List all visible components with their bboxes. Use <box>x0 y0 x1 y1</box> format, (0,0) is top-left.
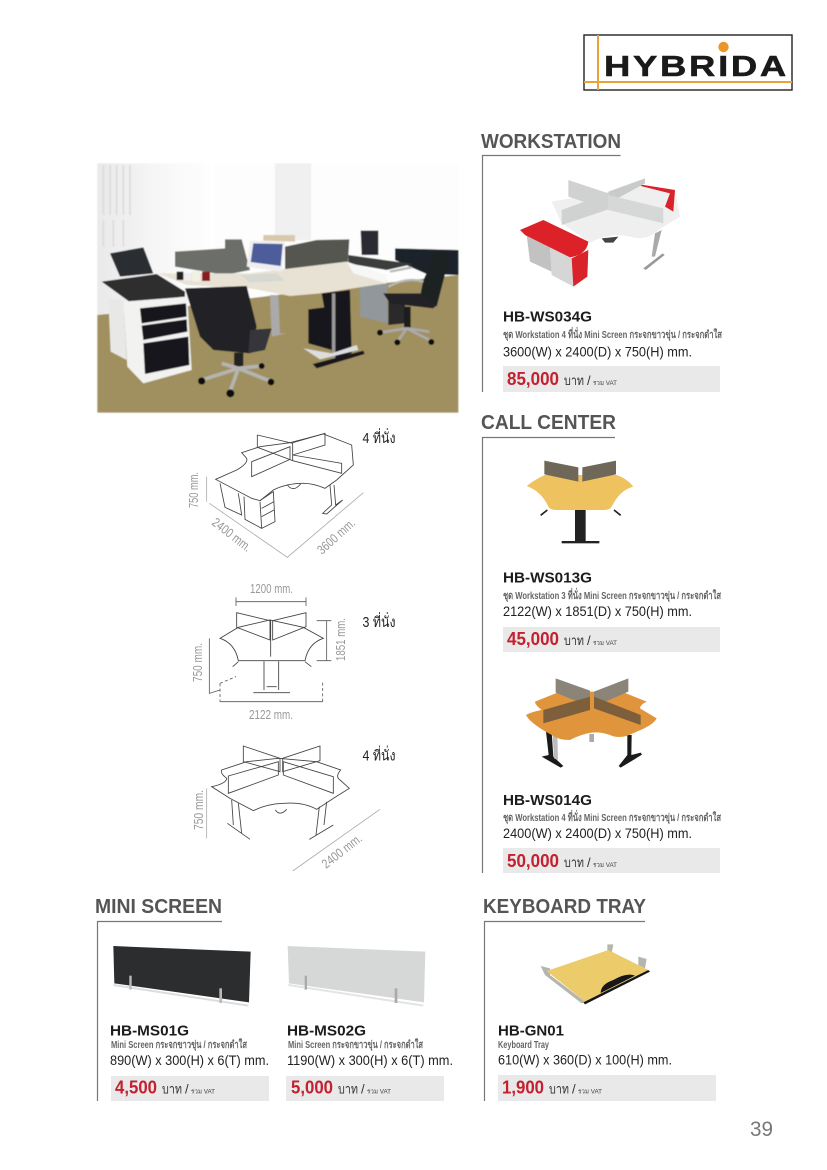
label: 4 seats: 4 ที่นั่ง <box>362 428 396 447</box>
panel: mini screen <box>95 896 453 1101</box>
price bar <box>498 1075 716 1101</box>
price bar: รวม VAT <box>593 640 617 647</box>
product code: HB-WS014G <box>503 792 592 809</box>
logo: Hybrida <box>584 35 792 90</box>
price bar <box>111 1076 269 1101</box>
dimensions: 610(W) x 360(D) x 100(H) mm. <box>498 1052 672 1068</box>
product code: HB-MS02G <box>287 1022 366 1040</box>
price bar: รวม VAT <box>578 1088 602 1096</box>
price bar: บาท <box>564 373 584 388</box>
price bar: / <box>587 633 591 648</box>
description: ชุด Workstation 4 ที่นั่ง Mini Screen กระจกขาวขุ่น / กระจกดำใส <box>503 809 721 825</box>
price bar: รวม VAT <box>593 380 617 387</box>
price bar: บาท <box>564 633 584 648</box>
description: Keyboard Tray <box>498 1039 549 1051</box>
panel: workstation <box>481 131 722 392</box>
description: ชุด Workstation 4 ที่นั่ง Mini Screen กระจกขาวขุ่น / กระจกดำใส <box>503 326 722 342</box>
dimensions: 2122(W) x 1851(D) x 750(H) mm. <box>503 603 692 619</box>
panel: keyboard tray <box>483 896 716 1101</box>
product image: HB-MS01G <box>113 946 251 1006</box>
product code: HB-GN01 <box>498 1022 564 1040</box>
heading: mini screen: MINI SCREEN <box>95 896 222 918</box>
label: 2400 mm depth: 2400 mm. <box>209 515 255 555</box>
label: 1200 mm: 1200 mm. <box>250 581 293 596</box>
product image: HB-WS014G <box>526 678 657 768</box>
price bar: 50,000 <box>507 851 559 871</box>
price bar: บาท <box>338 1082 358 1096</box>
label: 2122 mm: 2122 mm. <box>249 707 293 722</box>
price bar: 45,000 <box>507 629 559 649</box>
price bar: บาท <box>549 1082 569 1096</box>
price bar <box>503 627 720 652</box>
description: ชุด Workstation 3 ที่นั่ง Mini Screen กระจกขาวขุ่น / กระจกดำใส <box>503 587 721 603</box>
drawing: 4-seat workstation with pedestals <box>207 433 363 557</box>
price bar: บาท <box>162 1082 182 1096</box>
product code: HB-WS034G <box>503 308 592 326</box>
label: 3600 mm width: 3600 mm. <box>314 515 358 557</box>
price bar: / <box>361 1082 365 1096</box>
price bar: 4,500 <box>115 1078 157 1098</box>
product image: HB-WS034G <box>520 178 680 287</box>
price bar: / <box>587 855 591 870</box>
price bar: 85,000 <box>507 369 559 389</box>
price bar: 5,000 <box>291 1078 333 1098</box>
heading: keyboard tray: KEYBOARD TRAY <box>483 896 647 918</box>
drawing: 4-seat cross workstation <box>207 746 380 871</box>
price bar: บาท <box>564 855 584 870</box>
label: 1851 mm: 1851 mm. <box>333 618 348 661</box>
panel: call center <box>481 412 721 873</box>
dimensions: 3600(W) x 2400(D) x 750(H) mm. <box>503 344 692 360</box>
label: 2400 mm: 2400 mm. <box>319 831 365 871</box>
heading: call center: CALL CENTER <box>481 412 617 434</box>
description: Mini Screen กระจกขาวขุ่น / กระจกดำใส <box>111 1037 247 1052</box>
price bar: / <box>572 1082 576 1096</box>
product code: HB-WS013G <box>503 570 592 586</box>
label: 750 mm height: 750 mm. <box>186 472 201 508</box>
product image: HB-GN01 <box>541 944 650 1004</box>
photo: office workstation <box>97 163 458 413</box>
drawing: 3-seat workstation <box>209 597 331 702</box>
price bar: / <box>185 1082 189 1096</box>
label: 750 mm height: 750 mm. <box>191 790 206 830</box>
dimensions: 1190(W) x 300(H) x 6(T) mm. <box>287 1052 453 1068</box>
dimensions: 890(W) x 300(H) x 6(T) mm. <box>110 1052 269 1068</box>
heading: workstation: WORKSTATION <box>481 131 621 153</box>
label: 4 seats: 4 ที่นั่ง <box>362 746 396 764</box>
price bar: รวม VAT <box>367 1088 391 1096</box>
logo: Hybrida: HYBRIDA <box>604 50 789 82</box>
price bar <box>503 848 720 873</box>
label: 750 mm height: 750 mm. <box>190 643 205 682</box>
product code: HB-MS01G <box>110 1022 189 1040</box>
price bar <box>503 366 720 392</box>
price bar: รวม VAT <box>593 862 617 869</box>
price bar: รวม VAT <box>191 1088 215 1096</box>
product image: HB-MS02G <box>288 946 425 1006</box>
label: 3 seats: 3 ที่นั่ง <box>362 612 396 631</box>
price bar <box>286 1076 444 1101</box>
price bar: / <box>587 373 591 388</box>
dimensions: 2400(W) x 2400(D) x 750(H) mm. <box>503 825 692 841</box>
description: Mini Screen กระจกขาวขุ่น / กระจกดำใส <box>288 1037 423 1052</box>
page number: 39 <box>750 1118 773 1141</box>
price bar: 1,900 <box>502 1078 544 1098</box>
product image: HB-WS013G <box>527 461 633 543</box>
